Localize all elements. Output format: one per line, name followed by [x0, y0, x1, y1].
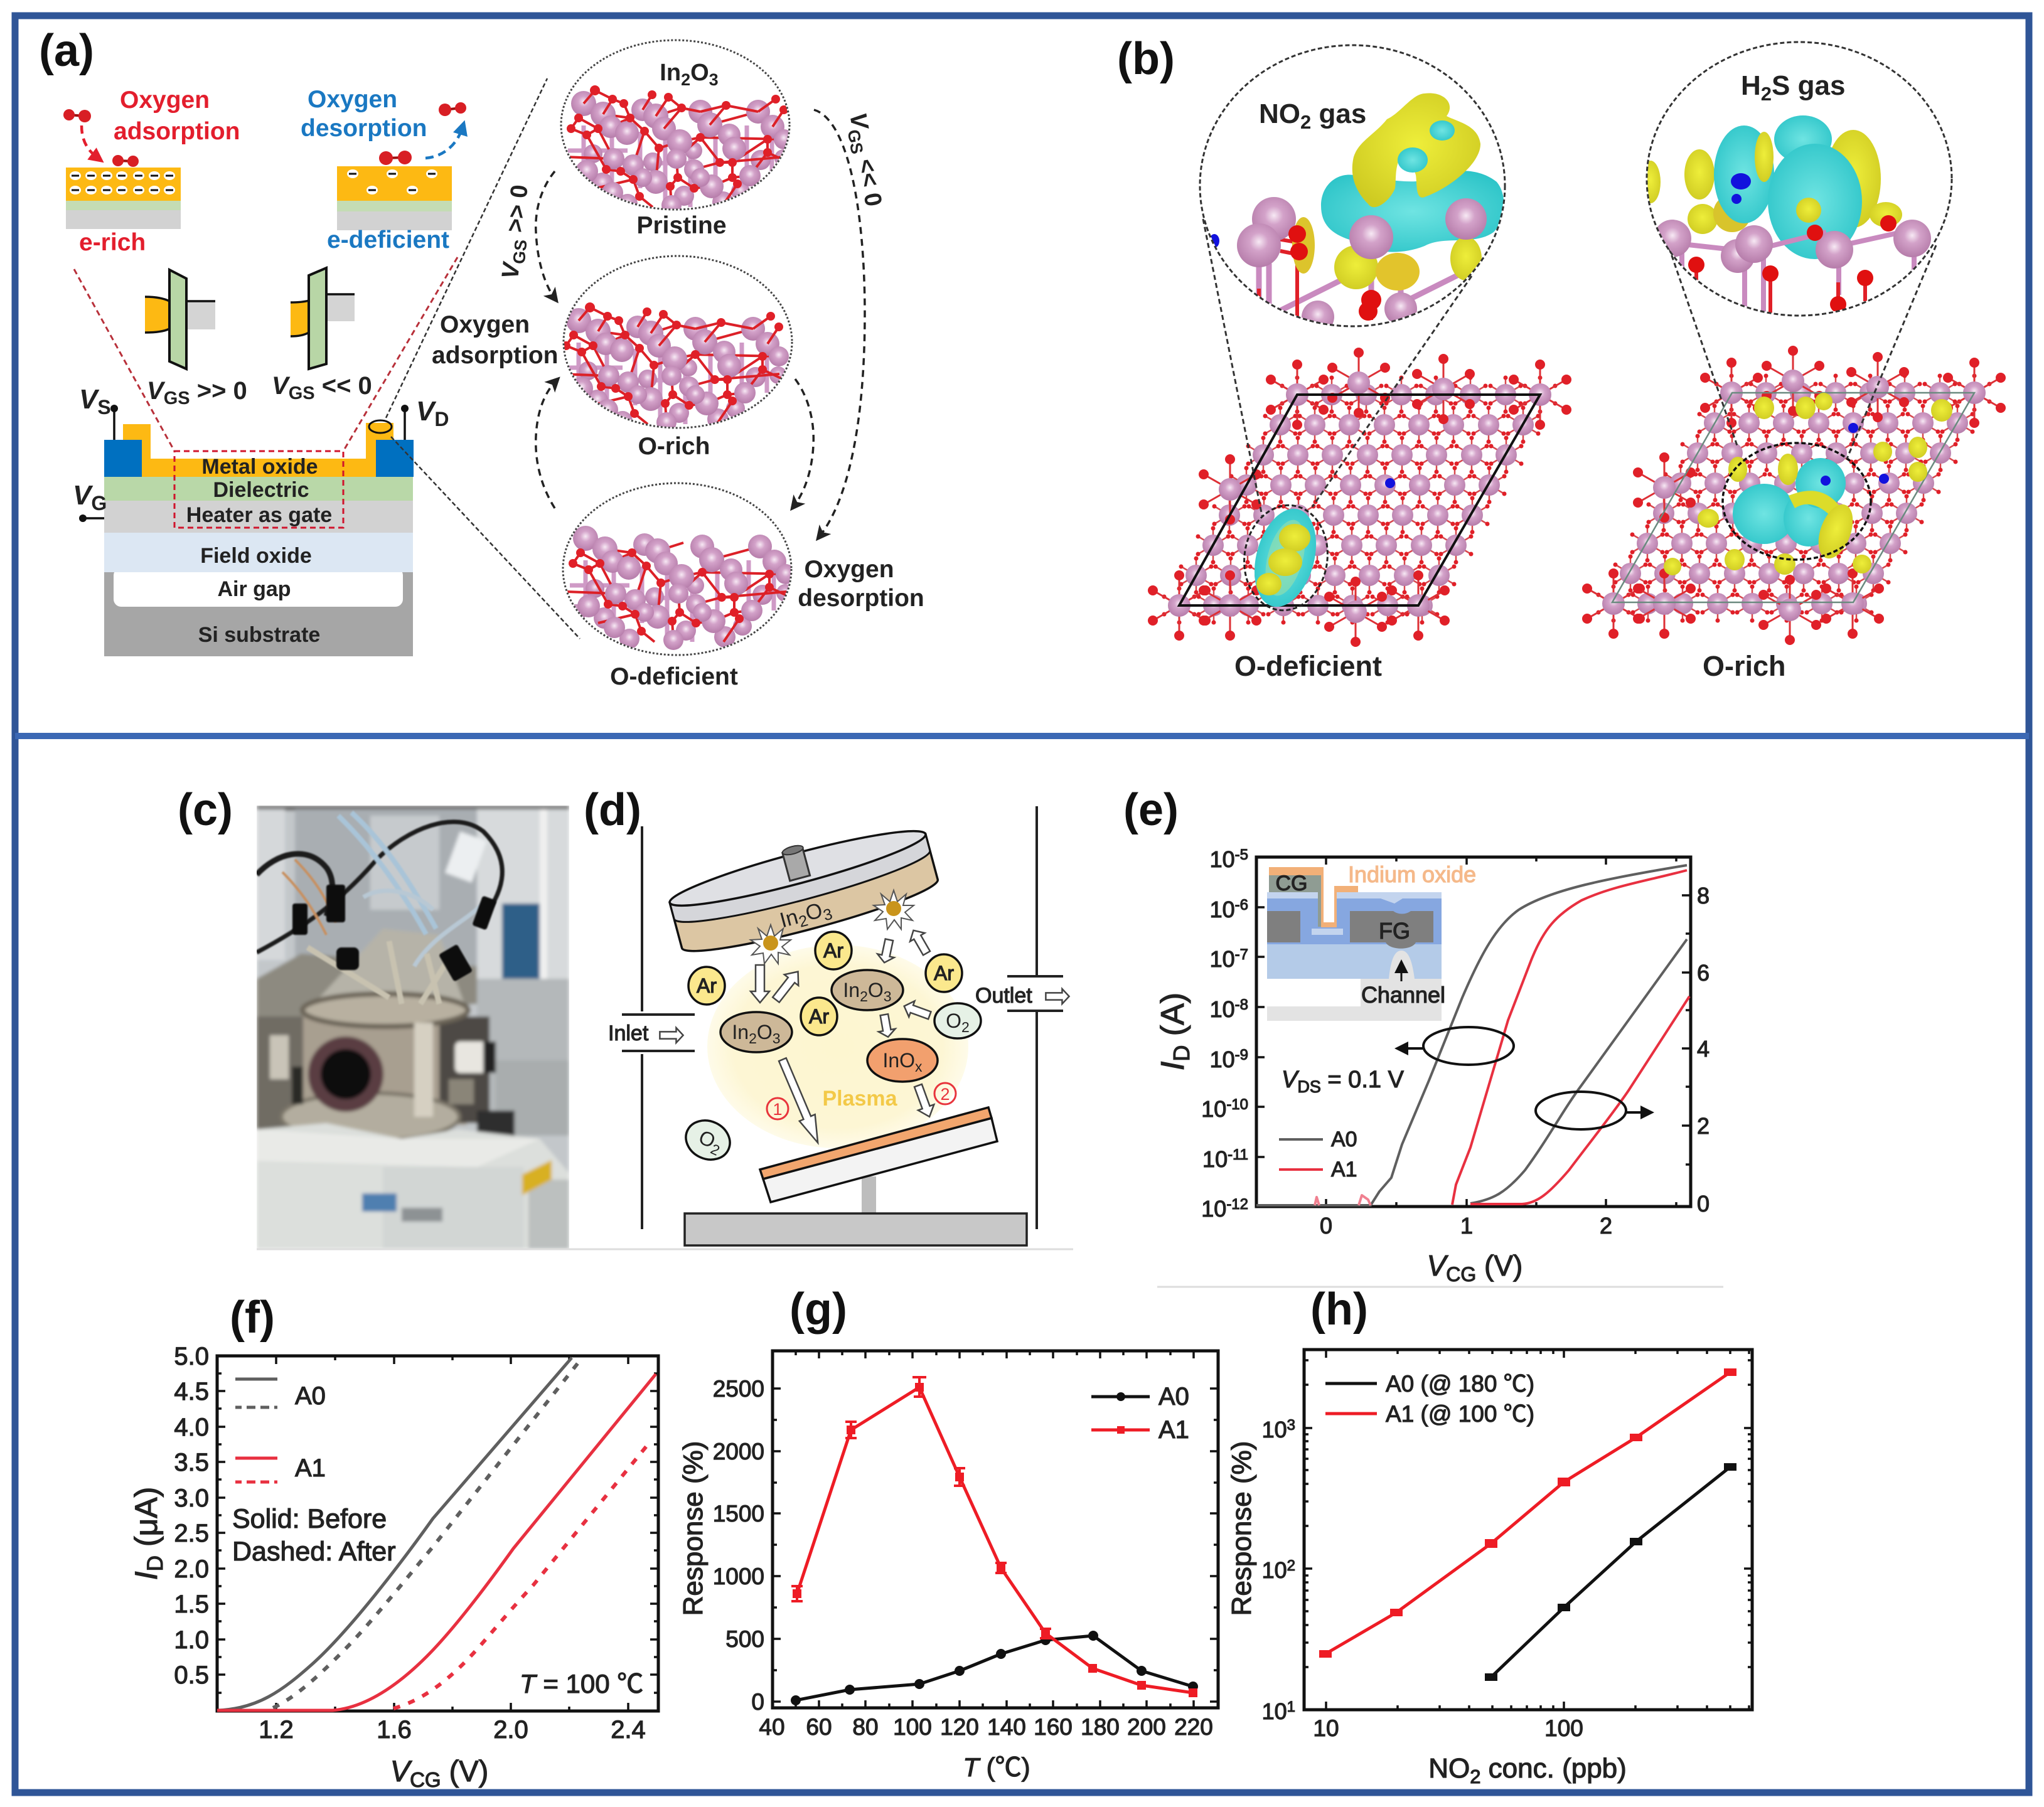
left axis labels: 10 [1210, 897, 1235, 922]
e-deficient stack with oxygen desorption: desorption [301, 115, 427, 142]
x tick labels: 1.2 [259, 1716, 294, 1744]
x tick labels [759, 1714, 1213, 1740]
label (h): (h) [1310, 1284, 1368, 1335]
left axis labels: -9 [1235, 1047, 1248, 1063]
In2O3 pristine: In [660, 60, 681, 86]
ion impact sparks [751, 890, 914, 964]
y tick labels [1262, 1417, 1295, 1724]
solid / dashed note: Dashed: After [232, 1537, 396, 1567]
device cross-section: V [416, 396, 437, 427]
species: Ar atoms: Ar [809, 1005, 829, 1028]
y tick labels: 4.0 [174, 1414, 209, 1441]
plot axes and ticks [1256, 857, 1691, 1207]
x tick labels: 100 [1544, 1715, 1583, 1741]
label (d): (d) [584, 785, 641, 835]
left axis labels: 10 [1210, 846, 1235, 872]
x axis title: CG [410, 1768, 441, 1791]
x axis title: CG [1446, 1263, 1476, 1286]
H2S gas charge density zoom: H [1741, 70, 1761, 101]
x axis title: NO [1428, 1753, 1470, 1784]
right axis labels: 4 [1697, 1036, 1710, 1062]
device cross-section: G [91, 492, 107, 514]
outlet label: Outlet [975, 984, 1032, 1008]
species: In2O3 and InOx: 3 [773, 1030, 781, 1047]
y tick labels: 2.0 [174, 1555, 209, 1583]
left axis labels: -8 [1235, 996, 1248, 1013]
plasma glow [707, 945, 968, 1148]
left axis labels: -11 [1228, 1146, 1248, 1163]
band diagram: VGS >> 0 [145, 270, 247, 408]
x tick labels [1313, 1715, 1583, 1741]
y tick labels: 4.5 [174, 1378, 209, 1405]
O-deficient lattice [1148, 348, 1571, 682]
y tick labels: 3 [1287, 1417, 1295, 1434]
species: In2O3 and InOx: 2 [749, 1030, 757, 1047]
panel: (e) transfer curves [1123, 785, 1723, 1287]
species: In2O3 and InOx: 3 [884, 988, 892, 1005]
axes and ticks [1304, 1350, 1752, 1710]
band diagram: VGS << 0: GS [289, 383, 315, 403]
x tick labels: 180 [1081, 1714, 1120, 1740]
O-deficient lattice: O-deficient [1234, 650, 1382, 682]
NO2 gas charge density zoom: 2 [1300, 111, 1311, 133]
panel: (b) charge density [1117, 34, 2006, 682]
x tick labels: 60 [806, 1714, 832, 1740]
solid / dashed note: Solid: Before [232, 1504, 387, 1534]
legend: A0 [1158, 1383, 1189, 1410]
left axis labels: -5 [1235, 846, 1248, 863]
y axis title: I [129, 1571, 164, 1580]
x axis labels: 1 [1460, 1213, 1473, 1239]
e-rich stack with oxygen adsorption [63, 87, 240, 256]
device cross-section: Heater as gate [186, 503, 332, 527]
x tick labels: 10 [1313, 1715, 1339, 1741]
y tick labels [713, 1376, 764, 1715]
y tick labels: 0.5 [174, 1661, 209, 1689]
plasma label and route numbers: Plasma [822, 1087, 898, 1111]
left axis labels: 10 [1201, 1196, 1226, 1222]
y axis title: (μA) [129, 1487, 164, 1555]
VDS annotation: = 0.1 V [1321, 1067, 1405, 1093]
x axis title: 2 [1470, 1766, 1480, 1788]
inset: device structure: FG [1379, 918, 1410, 944]
panel: (a) device and oxygen adsorption mechanism [39, 26, 924, 690]
O-rich zoom lines [1664, 232, 1936, 459]
species: In2O3 and InOx: In [843, 979, 860, 1001]
In2O3 O-deficient: O-deficient [610, 663, 738, 690]
species: In2O3 and InOx: InO [882, 1049, 915, 1072]
y tick labels: 500 [725, 1626, 764, 1652]
species: Ar atoms: Ar [697, 974, 717, 997]
oxygen desorption label [798, 556, 924, 612]
x tick labels: 160 [1034, 1714, 1073, 1740]
legend: A1 (@ 100 ℃) [1386, 1401, 1534, 1427]
rotated label VGS >> 0: V [497, 260, 525, 280]
x axis title: conc. (ppb) [1480, 1753, 1627, 1784]
right axis labels: 8 [1697, 883, 1710, 909]
device cross-section: Metal oxide [201, 455, 318, 479]
panel: (f) ID vs VCG before/after [129, 1293, 658, 1791]
species: Ar atoms [688, 932, 962, 1035]
left axis labels: -10 [1226, 1096, 1248, 1113]
x tick labels: 140 [987, 1714, 1026, 1740]
legend: A1 [1331, 1158, 1357, 1181]
chamber walls [622, 806, 1063, 1229]
x tick labels: 1.6 [377, 1716, 412, 1744]
legend: A0 [1331, 1127, 1357, 1151]
label (e): (e) [1123, 785, 1179, 835]
temperature note: T = 100 ℃ [520, 1669, 643, 1698]
inset: device structure: CG [1275, 872, 1308, 895]
axis ellipses with direction arrows [1398, 1027, 1651, 1129]
series A0 [1485, 1463, 1736, 1681]
plasma label and route numbers [767, 1083, 956, 1119]
species: O2: 2 [708, 1141, 722, 1159]
label (b): (b) [1117, 34, 1175, 84]
left axis labels: 10 [1210, 1047, 1235, 1072]
y axis title: Response (%) [678, 1441, 709, 1616]
x axis title: (V) [441, 1754, 488, 1788]
plasma label and route numbers: 2 [940, 1085, 950, 1104]
x tick labels: 200 [1127, 1714, 1166, 1740]
VDS annotation: DS [1297, 1077, 1321, 1096]
species: O2: 2 [961, 1019, 970, 1035]
y axis title: (A) [1155, 993, 1191, 1045]
block arrows [751, 926, 938, 1146]
right axis labels: 2 [1697, 1113, 1710, 1139]
species: O2: O [946, 1010, 961, 1032]
left axis labels: 10 [1201, 1096, 1226, 1122]
y axis title: Response (%) [1226, 1441, 1257, 1616]
y tick labels: 10 [1262, 1417, 1287, 1442]
O-rich lattice [1582, 346, 2006, 682]
x tick labels: 80 [852, 1714, 879, 1740]
inset: device structure: Channel [1361, 982, 1445, 1008]
y tick labels: 0 [751, 1689, 764, 1715]
legend: A0 [295, 1382, 326, 1410]
In2O3 pristine: 3 [709, 70, 719, 89]
band diagram: VGS >> 0: >> 0 [190, 377, 247, 405]
x tick labels: 2.0 [493, 1716, 528, 1744]
y axis title: D [143, 1555, 168, 1571]
species: O2: O [695, 1126, 719, 1153]
O-deficient zoom lines [1203, 219, 1472, 516]
e-rich stack with oxygen adsorption: adsorption [114, 118, 240, 145]
y tick labels: 2.5 [174, 1520, 209, 1547]
label (c): (c) [178, 785, 233, 835]
photo: sputter chamber [257, 806, 569, 1249]
In2O3 pristine: 2 [681, 70, 690, 89]
e-rich stack with oxygen adsorption: e-rich [79, 229, 146, 256]
In2O3 pristine: O [690, 60, 709, 86]
species: In2O3 and InOx [720, 970, 938, 1082]
In2O3 pristine: Pristine [636, 212, 727, 239]
legend [1279, 1127, 1357, 1181]
O-rich lattice: O-rich [1703, 650, 1786, 682]
label (a): (a) [39, 26, 94, 76]
oxygen adsorption label [432, 311, 559, 369]
right axis labels [1697, 883, 1710, 1217]
y tick labels: 1000 [713, 1564, 764, 1589]
NO2 gas charge density zoom: NO [1259, 99, 1300, 129]
y tick labels: 10 [1262, 1698, 1287, 1724]
NO2 gas charge density zoom [1200, 45, 1506, 333]
y tick labels: 2 [1287, 1557, 1295, 1574]
right axis labels: 6 [1697, 960, 1710, 986]
substrate on stage [685, 1107, 1027, 1245]
species: In2O3 and InOx: O [868, 979, 884, 1001]
species: In2O3 and InOx: x [915, 1058, 923, 1075]
species: In2O3 and InOx: 2 [860, 988, 868, 1005]
inset: device structure: Indium oxide [1348, 861, 1476, 887]
y tick labels: 1500 [713, 1501, 764, 1527]
e-deficient stack with oxygen desorption: Oxygen [308, 86, 397, 113]
In2O3 O-rich: O-rich [638, 433, 710, 460]
x axis labels: 2 [1600, 1213, 1612, 1239]
H2S gas charge density zoom: 2 [1761, 83, 1772, 105]
device cross-section [73, 257, 457, 656]
H2S gas charge density zoom [1640, 42, 1952, 320]
inlet label: Inlet [608, 1021, 649, 1045]
y axis title: I [1155, 1062, 1191, 1070]
x axis title: T (℃) [963, 1752, 1030, 1782]
inlet label [608, 1021, 683, 1045]
device cross-section: Air gap [217, 577, 291, 601]
oxygen adsorption label: Oxygen [440, 311, 530, 338]
left axis labels: -7 [1235, 946, 1248, 963]
target disc In2O3: In [778, 905, 801, 932]
device cross-section: Field oxide [200, 544, 312, 568]
x axis title: V [1427, 1249, 1449, 1282]
y tick labels: 1.0 [174, 1626, 209, 1654]
x tick labels: 2.4 [611, 1716, 646, 1744]
series A1 [1319, 1368, 1736, 1658]
rotated label VGS >> 0: GS [510, 238, 531, 265]
band diagram: VGS << 0 [272, 268, 372, 403]
y tick labels: 3.5 [174, 1449, 209, 1476]
x axis labels: 0 [1320, 1213, 1332, 1239]
rotated label VGS << 0: << 0 [851, 151, 887, 208]
In2O3 O-deficient [563, 483, 796, 690]
left axis labels: -12 [1226, 1196, 1248, 1213]
oxygen desorption label: Oxygen [804, 556, 894, 583]
device cross-section: Si substrate [198, 623, 320, 647]
label (g): (g) [789, 1284, 847, 1335]
In2O3 O-rich [560, 256, 792, 460]
panel: (d) sputtering schematic [257, 785, 1073, 1249]
panel: (c) sputtering system photo [178, 785, 569, 1249]
y tick labels: 2000 [713, 1439, 764, 1464]
oxygen desorption label: desorption [798, 585, 924, 612]
H2S gas charge density zoom: S gas [1772, 70, 1845, 101]
device cross-section: V [73, 480, 94, 511]
target disc In2O3: 3 [821, 905, 835, 924]
x tick labels [259, 1716, 646, 1744]
species: O2 [680, 1003, 981, 1166]
transition arrows [536, 110, 865, 537]
device cross-section: V [79, 384, 100, 415]
legend: A1 [1158, 1416, 1189, 1444]
y tick labels: 3.0 [174, 1485, 209, 1512]
y tick labels [174, 1343, 209, 1689]
rotated label VGS << 0: GS [844, 128, 867, 156]
species: In2O3 and InOx: In [732, 1021, 749, 1043]
y tick labels: 10 [1262, 1557, 1287, 1583]
device cross-section: D [434, 408, 449, 430]
zoom lines to In2O3 surface [386, 78, 580, 639]
left axis labels: 10 [1210, 946, 1235, 972]
species: In2O3 and InOx: O [757, 1021, 773, 1043]
target disc In2O3: 2 [797, 912, 810, 931]
left axis labels: 10 [1202, 1146, 1228, 1172]
e-deficient stack with oxygen desorption [301, 86, 466, 253]
NO2 gas charge density zoom: gas [1311, 99, 1366, 129]
band diagram: VGS >> 0: GS [164, 388, 190, 408]
e-deficient stack with oxygen desorption: e-deficient [327, 227, 449, 253]
e-rich stack with oxygen adsorption: Oxygen [120, 87, 210, 114]
left axis labels: 10 [1210, 996, 1235, 1022]
left axis labels [1201, 846, 1248, 1222]
x axis title: (V) [1476, 1249, 1522, 1282]
x axis title: V [390, 1754, 412, 1788]
panel: (h) response vs concentration [1226, 1284, 1752, 1788]
legend [1091, 1383, 1189, 1444]
device cross-section: Dielectric [213, 478, 309, 502]
legend [1325, 1371, 1534, 1427]
axes and ticks [773, 1351, 1218, 1708]
curves [217, 1358, 656, 1710]
outlet label [975, 984, 1069, 1008]
series A0 [791, 1631, 1198, 1705]
y tick labels: 1.5 [174, 1591, 209, 1618]
left axis labels: -6 [1235, 897, 1248, 914]
y tick labels: 2500 [713, 1376, 764, 1402]
y tick labels: 1 [1287, 1698, 1295, 1715]
axes and ticks [217, 1356, 658, 1711]
x tick labels: 220 [1174, 1714, 1213, 1740]
band diagram: VGS << 0: V [272, 372, 291, 400]
y tick labels: 5.0 [174, 1343, 209, 1370]
inset: device structure [1267, 861, 1476, 1021]
y axis title: D [1169, 1045, 1194, 1062]
oxygen adsorption label: adsorption [432, 342, 559, 369]
species: Ar atoms: Ar [934, 962, 954, 984]
legend [235, 1379, 326, 1485]
series A1 with error bars [791, 1377, 1197, 1697]
band diagram: VGS >> 0: V [147, 377, 166, 405]
x tick labels: 100 [893, 1714, 932, 1740]
target disc In2O3: O [803, 898, 825, 925]
VDS annotation: V [1282, 1067, 1300, 1093]
legend: A0 (@ 180 ℃) [1386, 1371, 1534, 1397]
device cross-section: S [97, 396, 111, 418]
x tick labels: 120 [940, 1714, 979, 1740]
solid / dashed note [232, 1504, 396, 1567]
target disc In2O3 [664, 813, 941, 962]
label (f): (f) [230, 1293, 275, 1343]
plasma label and route numbers: 1 [773, 1100, 783, 1119]
legend: A1 [295, 1454, 326, 1482]
right axis labels: 0 [1697, 1191, 1710, 1217]
curves [1256, 865, 1689, 1205]
x tick labels: 40 [759, 1714, 785, 1740]
panel: (g) response vs temperature [678, 1284, 1218, 1782]
rotated label VGS >> 0: >> 0 [501, 183, 533, 240]
band diagram: VGS << 0: << 0 [315, 372, 372, 400]
rotated label VGS << 0: V [844, 110, 873, 132]
species: Ar atoms: Ar [823, 939, 843, 962]
In2O3 pristine [561, 40, 794, 239]
x axis labels [1320, 1213, 1612, 1239]
